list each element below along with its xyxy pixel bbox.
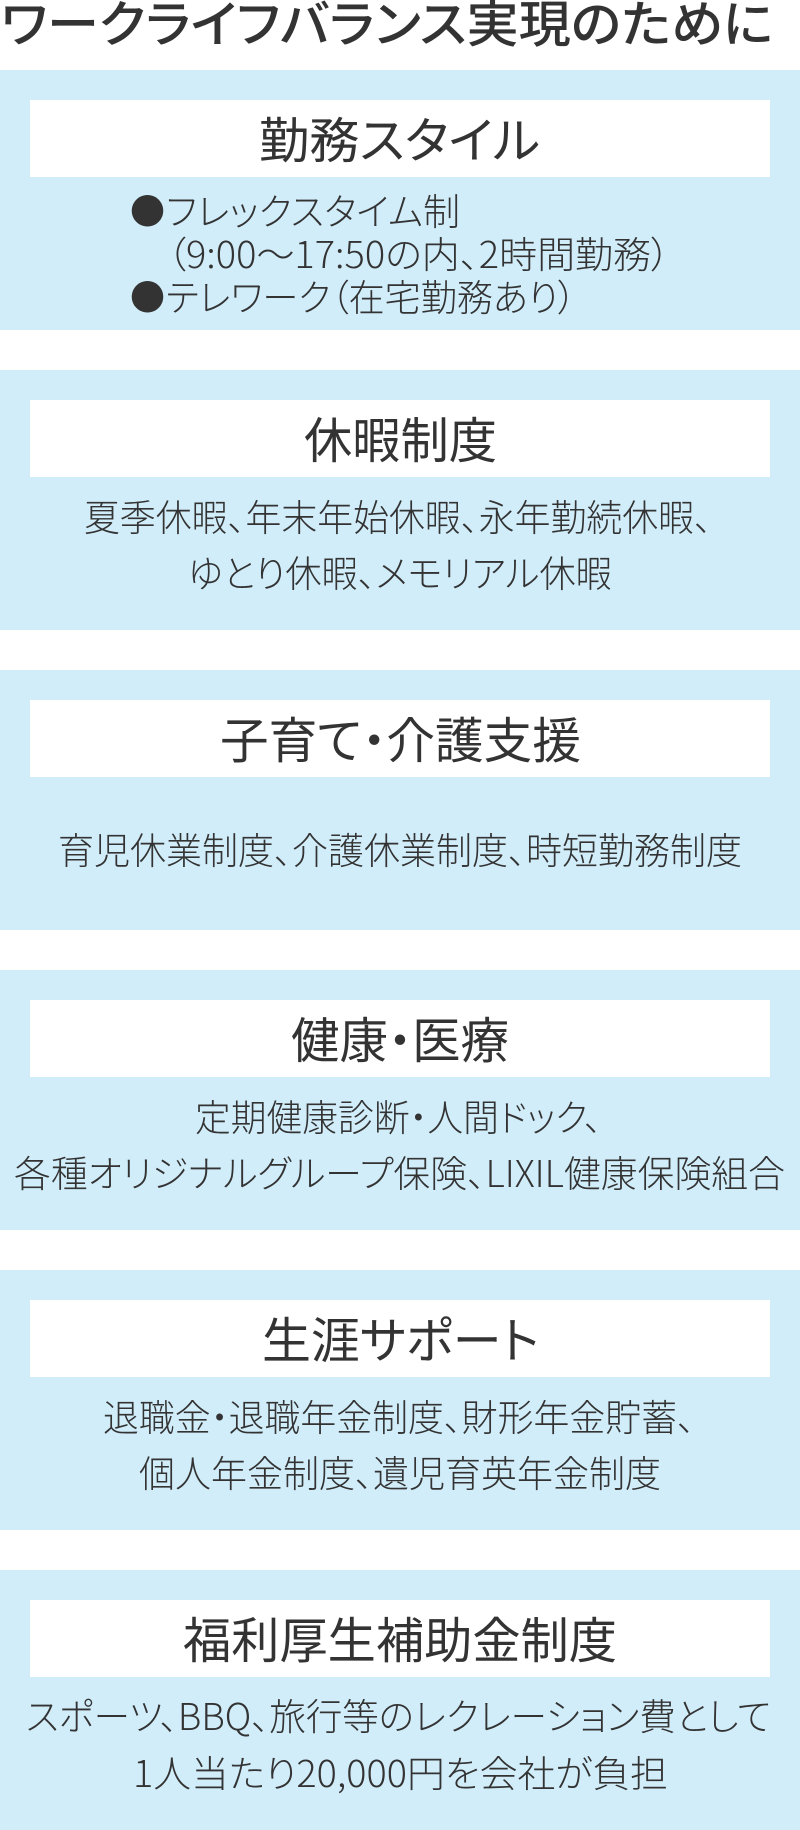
heading: childcare and nursing: 子育て・介護支援	[220, 702, 581, 773]
heading: work style: 勤務スタイル	[259, 102, 540, 173]
panel: leave	[0, 370, 800, 630]
text: welfare subsidy: スポーツ、BBQ、旅行等のレクレーション費として	[26, 1687, 771, 1741]
text: health and medical: 定期健康診断・人間ドック、	[195, 1088, 602, 1142]
text: health and medical	[14, 1088, 785, 1198]
text: lifetime support	[103, 1388, 695, 1498]
panel: childcare and nursing	[0, 670, 800, 930]
panel: work style	[0, 70, 800, 330]
text: health and medical: 各種オリジナルグループ保険、LIXIL健康保険組合	[14, 1144, 785, 1198]
text: welfare subsidy: 1人当たり20,000円を会社が負担	[133, 1744, 668, 1798]
bullet list: work style: ●	[130, 184, 165, 235]
bullet list: work style: フレックスタイム制	[166, 182, 460, 236]
text: childcare and nursing: 育児休業制度、介護休業制度、時短勤務制度	[58, 821, 742, 875]
heading: leave: 休暇制度	[304, 402, 497, 473]
panel: health and medical	[0, 970, 800, 1230]
heading: health and medical: 健康・医療	[291, 1002, 509, 1073]
bullet list: work style: （9:00～17:50の内、2時間勤務）	[167, 225, 670, 279]
text: lifetime support: 個人年金制度、遺児育英年金制度	[139, 1444, 661, 1498]
heading: lifetime support: 生涯サポート	[262, 1302, 539, 1373]
text: leave: ゆとり休暇、メモリアル休暇	[188, 544, 612, 598]
bullet list: work style: テレワーク（在宅勤務あり）	[166, 268, 576, 322]
text: leave: 夏季休暇、年末年始休暇、永年勤続休暇、	[84, 488, 712, 542]
heading: welfare subsidy: 福利厚生補助金制度	[183, 1602, 617, 1673]
panel: welfare subsidy	[0, 1570, 800, 1830]
panel: lifetime support	[0, 1270, 800, 1530]
bullet list: work style	[130, 182, 670, 322]
bullet list: work style: ●	[130, 270, 165, 321]
text: lifetime support: 退職金・退職年金制度、財形年金貯蓄、	[103, 1388, 695, 1442]
text: welfare subsidy	[26, 1687, 771, 1798]
text: leave	[84, 488, 712, 598]
